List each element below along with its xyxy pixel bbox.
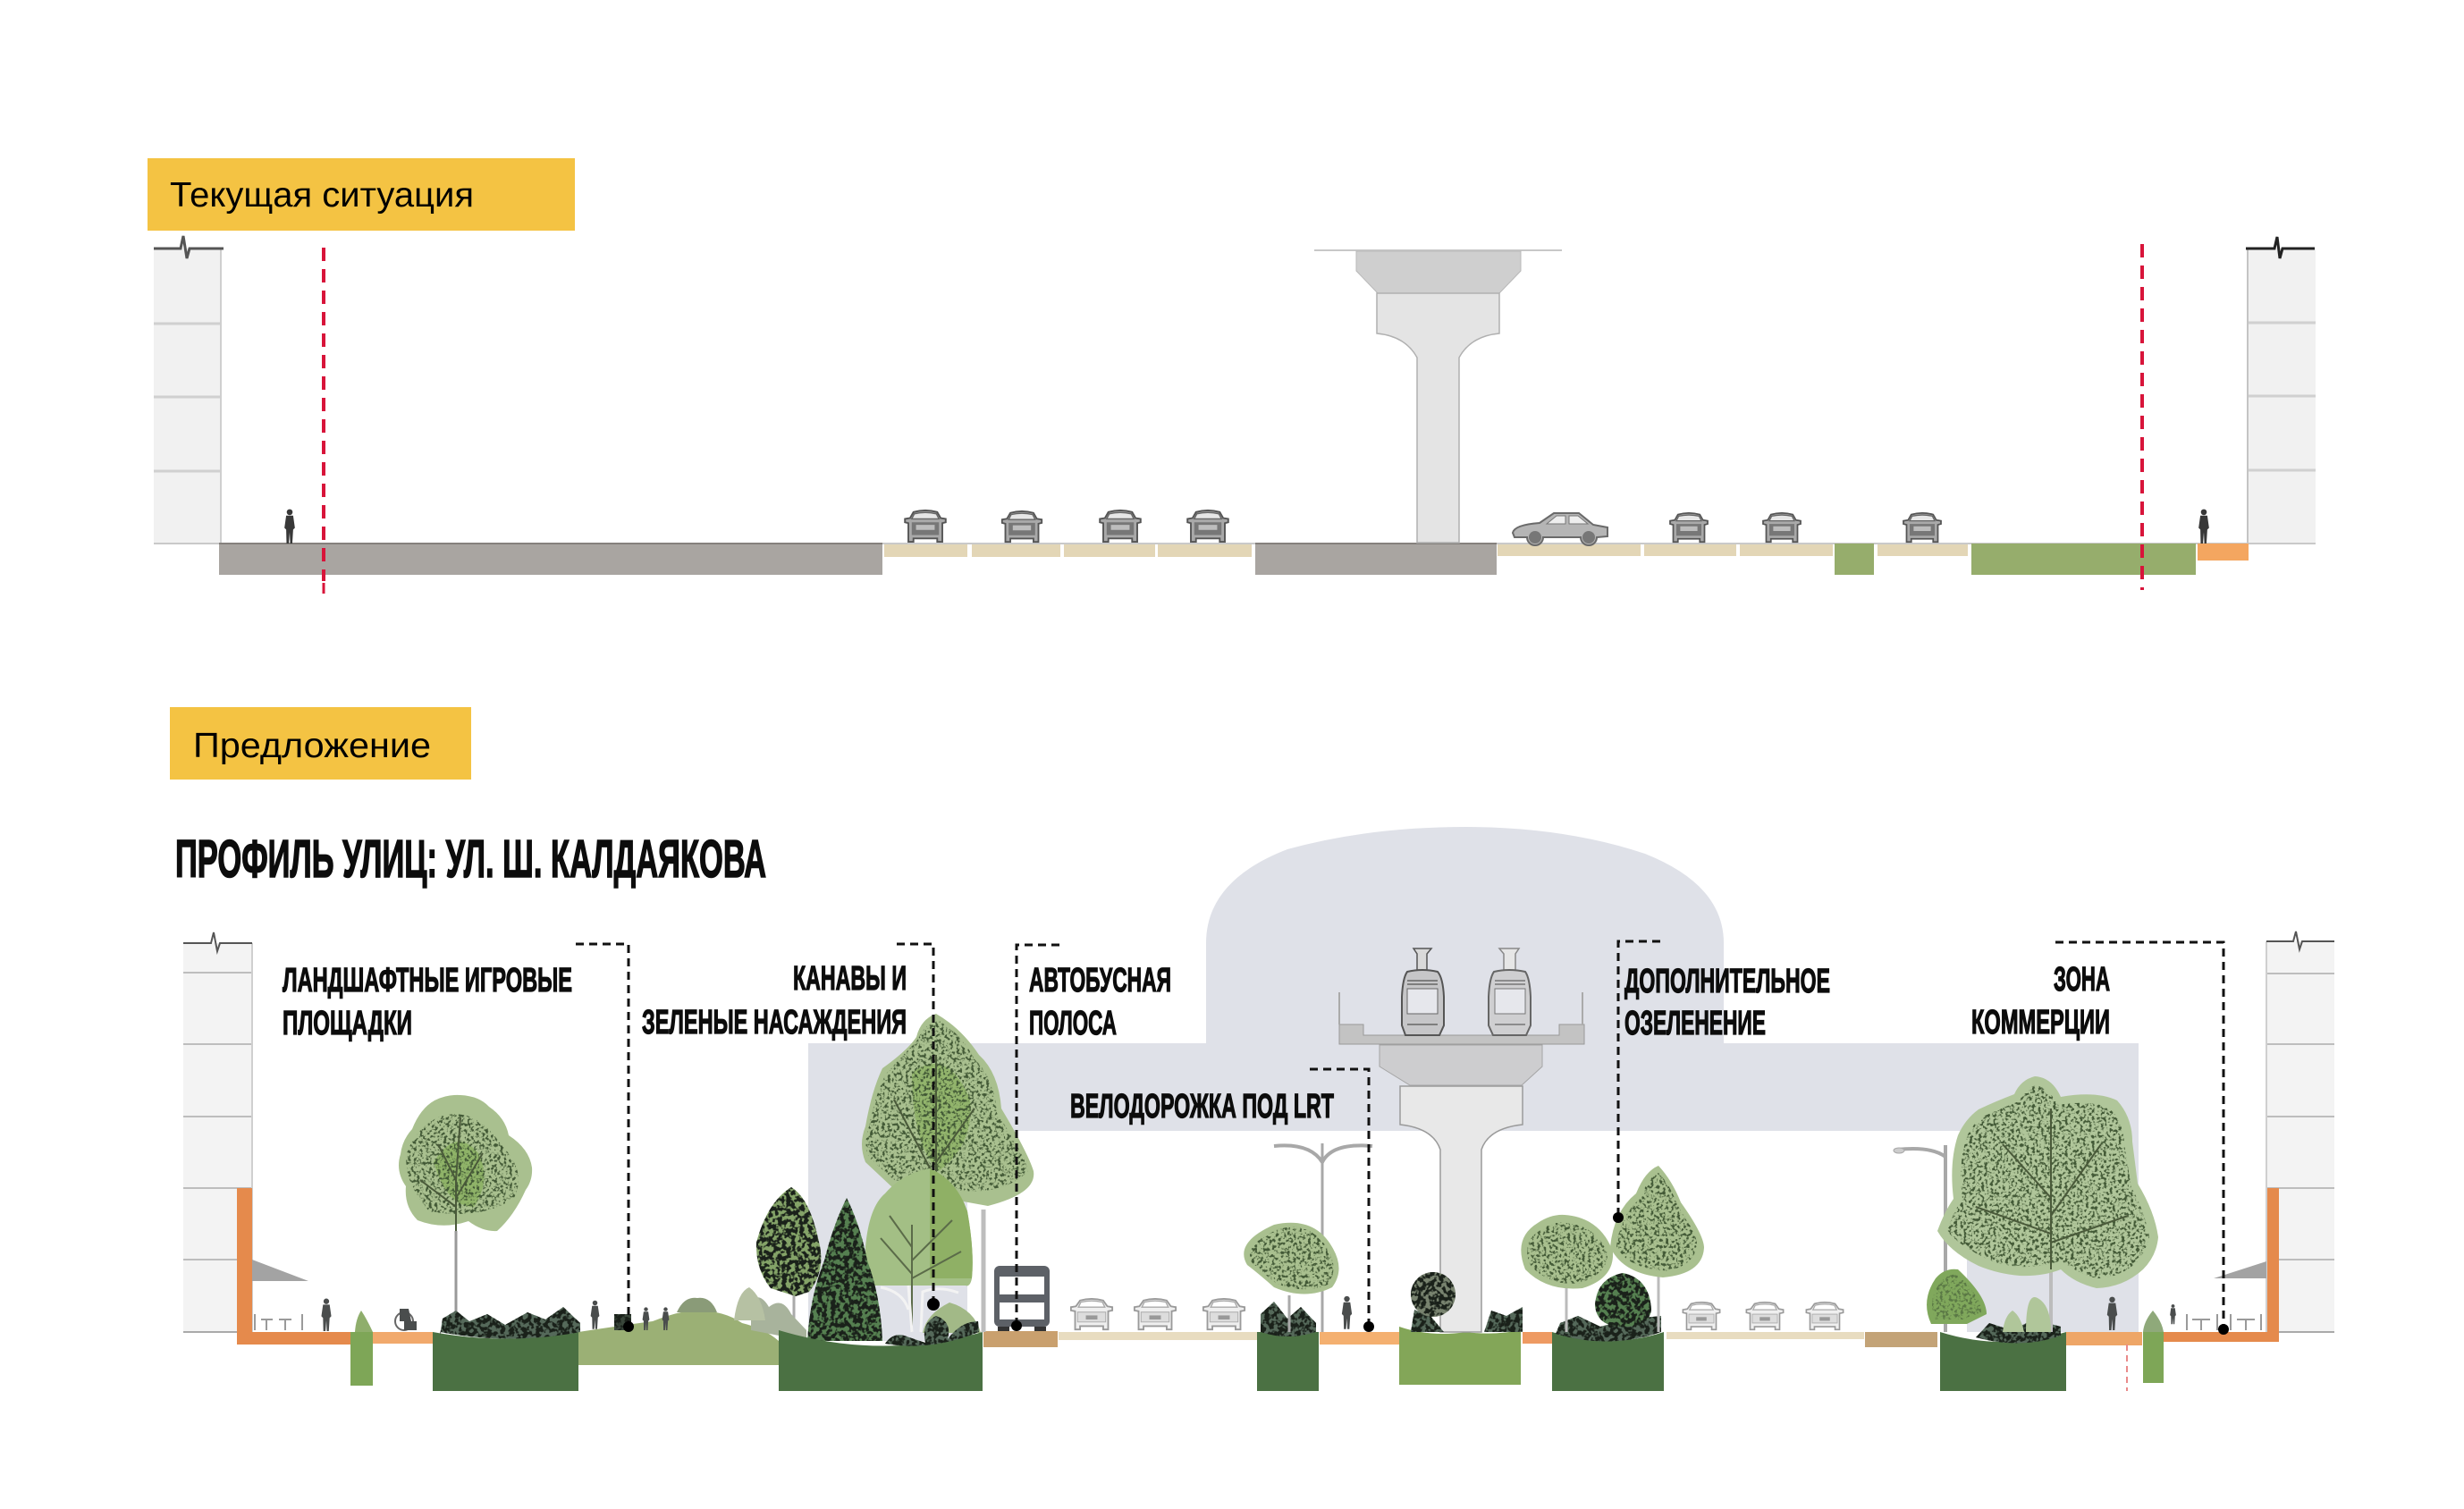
cars bbox=[905, 510, 1941, 545]
callout: bus lane: ПОЛОСА bbox=[1029, 1005, 1117, 1042]
building left bbox=[183, 932, 252, 1332]
LRT viaduct with trains bbox=[1339, 948, 1584, 1332]
small plants and grasses bbox=[355, 1287, 2164, 1332]
rounded tree bbox=[756, 1187, 821, 1332]
large tree bbox=[1937, 1076, 2158, 1332]
mound shrub bbox=[923, 1302, 981, 1333]
callout: bike path under LRT bbox=[1070, 1069, 1374, 1332]
dark tree bbox=[1595, 1273, 1651, 1327]
bus bbox=[994, 1266, 1050, 1331]
callout: bus lane bbox=[1011, 945, 1171, 1331]
awnings bbox=[252, 1260, 2266, 1281]
heading tag: current situation: Текущая ситуация bbox=[170, 176, 474, 215]
panel: proposed street section bbox=[183, 827, 2334, 1391]
people bbox=[321, 1296, 2176, 1331]
small shrub tree bbox=[1927, 1269, 1987, 1324]
panel: current street section bbox=[154, 236, 2316, 594]
callout: ditches and greenery bbox=[642, 944, 940, 1311]
callout: bus lane: АВТОБУСНАЯ bbox=[1029, 962, 1171, 999]
callout: additional greening: ОЗЕЛЕНЕНИЕ bbox=[1624, 1005, 1766, 1042]
building left bbox=[154, 236, 224, 544]
low grasses bbox=[751, 1297, 806, 1341]
callout: additional greening: ДОПОЛНИТЕЛЬНОЕ bbox=[1624, 963, 1830, 1000]
ground surfaces bbox=[183, 1188, 2334, 1391]
tree: playground bbox=[399, 1095, 532, 1332]
callout: landscape playgrounds: ЛАНДШАФТНЫЕ ИГРОВЫЕ bbox=[283, 962, 572, 999]
tree group: canal plantings bbox=[751, 1014, 1034, 1341]
callout: commercial zone: ЗОНА bbox=[2054, 961, 2110, 999]
train left bbox=[1402, 948, 1444, 1035]
building right bbox=[2246, 237, 2316, 544]
callout: ditches and greenery: КАНАВЫ И bbox=[793, 960, 907, 998]
cars bbox=[1071, 1299, 1844, 1329]
callout: commercial zone bbox=[1971, 942, 2229, 1335]
heading tag: proposal bbox=[170, 707, 471, 780]
callout: ditches and greenery: ЗЕЛЕНЫЕ НАСАЖДЕНИЯ bbox=[642, 1004, 907, 1041]
planter beds bbox=[433, 1330, 2066, 1391]
callout: landscape playgrounds: ПЛОЩАДКИ bbox=[283, 1005, 412, 1042]
ground surfaces bbox=[154, 544, 2316, 575]
callout: commercial zone: КОММЕРЦИИ bbox=[1971, 1004, 2110, 1041]
pedestrians bbox=[284, 510, 2209, 544]
round tree bbox=[1521, 1215, 1613, 1332]
street lamps bbox=[983, 1143, 1945, 1332]
shrubs in planters bbox=[440, 1302, 2061, 1346]
wheelchair user bbox=[395, 1309, 417, 1330]
LRT pillar bbox=[1314, 250, 1562, 543]
tree group: additional greening bbox=[1521, 1166, 1704, 1332]
callout: landscape playgrounds bbox=[283, 944, 634, 1332]
red boundary lines bbox=[324, 244, 2142, 594]
cone shrubs bbox=[2003, 1297, 2051, 1332]
pointed tree bbox=[1610, 1166, 1704, 1332]
callout: additional greening bbox=[1613, 941, 1830, 1223]
cafe tables bbox=[255, 1314, 2261, 1330]
train right bbox=[1489, 948, 1531, 1035]
tree group: commercial zone bbox=[1927, 1076, 2158, 1332]
heading tag: proposal: Предложение bbox=[193, 727, 431, 765]
callout: bike path under LRT: ВЕЛОДОРОЖКА ПОД LRT bbox=[1070, 1088, 1334, 1125]
tree: lane median bbox=[1244, 1223, 1339, 1332]
building right bbox=[2266, 932, 2334, 1332]
conifer bbox=[807, 1198, 882, 1341]
tall tree bbox=[862, 1014, 1034, 1206]
lavender LRT clearance zone bbox=[808, 827, 2139, 1341]
lower tree bbox=[865, 1168, 973, 1332]
tree: pillar base bbox=[1411, 1272, 1456, 1317]
title: ПРОФИЛЬ УЛИЦ: УЛ. Ш. КАЛДАЯКОВА bbox=[175, 830, 766, 889]
heading tag: current situation bbox=[148, 158, 575, 231]
